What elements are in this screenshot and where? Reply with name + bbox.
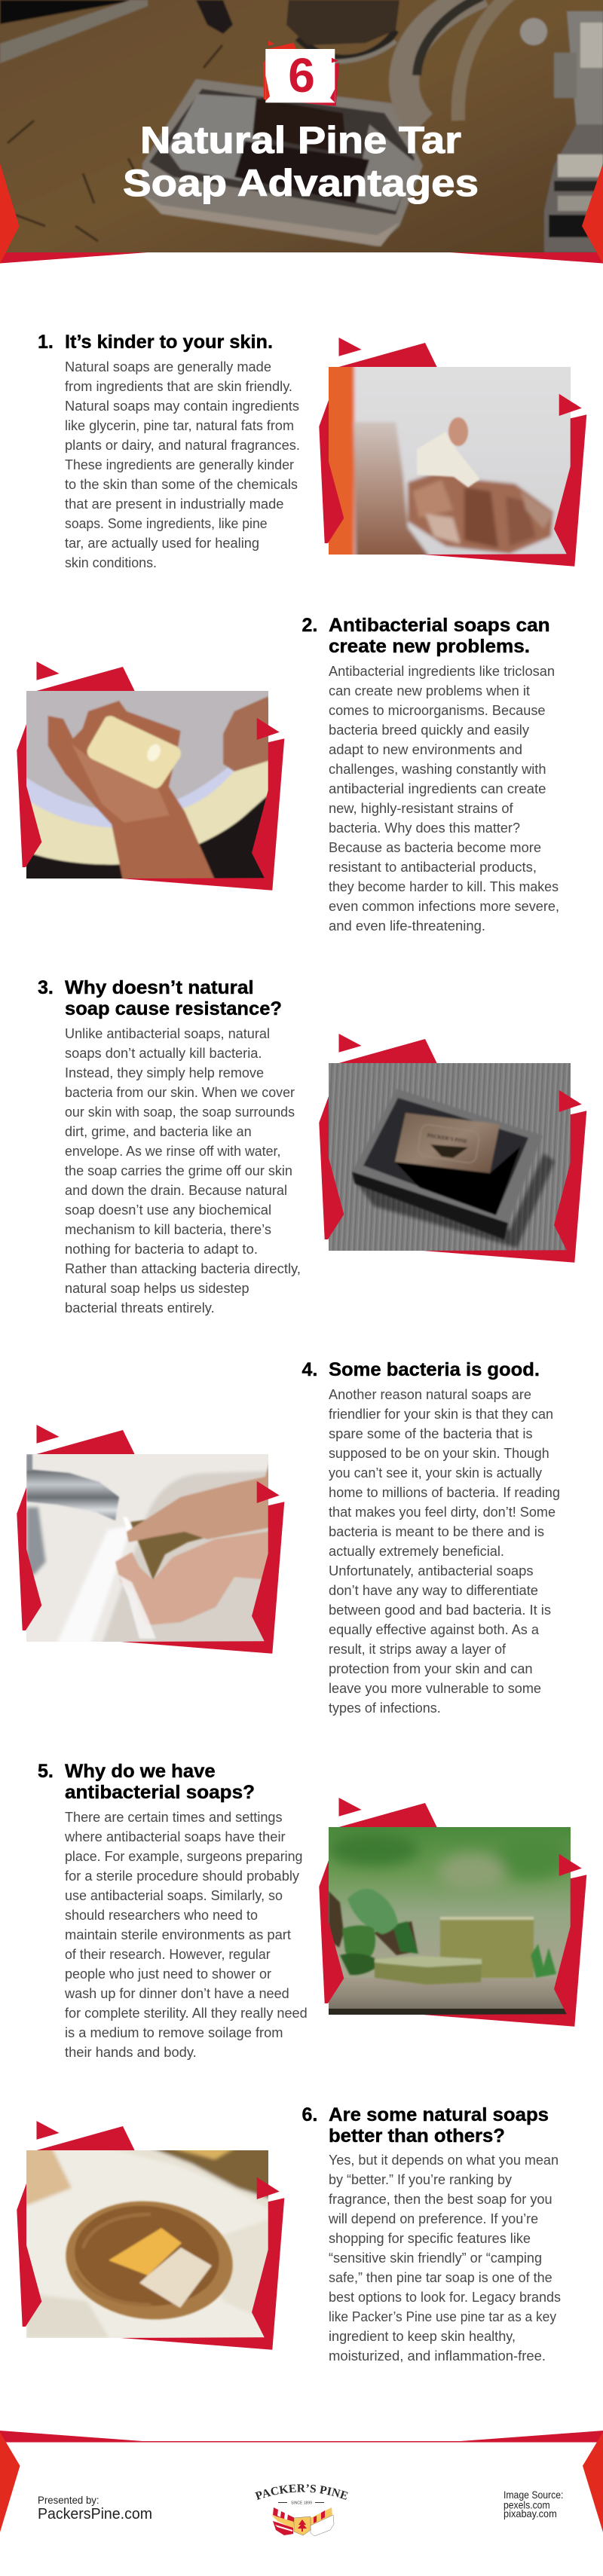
photo 2: hand holding soap over sink bbox=[23, 687, 275, 883]
body text 4: leave you more vulnerable to some bbox=[329, 1681, 541, 1696]
header side shard right bbox=[582, 163, 603, 264]
body text 4: Unfortunately, antibacterial soaps bbox=[329, 1563, 534, 1578]
body text 4: home to millions of bacteria. If reading bbox=[329, 1485, 560, 1500]
body text 3: our skin with soap, the soap surrounds bbox=[65, 1105, 295, 1120]
heading 5: Why do we have bbox=[65, 1761, 216, 1782]
body text 3: dirt, grime, and bacteria like an bbox=[65, 1124, 252, 1139]
photo 5: green soap bars with leaves bbox=[329, 1827, 571, 2015]
presented by: PackersPine.com bbox=[38, 2506, 152, 2523]
heading 3: soap cause resistance? bbox=[65, 998, 282, 1019]
body text 2: can create new problems when it bbox=[329, 683, 530, 698]
body text 5: place. For example, surgeons preparing bbox=[65, 1849, 303, 1864]
section 1: kinder to your skin bbox=[38, 332, 586, 570]
body text 1: tar, are actually used for healing bbox=[65, 536, 259, 551]
body text 6: like Packer’s Pine use pine tar as a key bbox=[329, 2309, 556, 2324]
body text 2: they become harder to kill. This makes bbox=[329, 879, 559, 894]
body text 4: bacteria is meant to be there and is bbox=[329, 1524, 544, 1539]
red frame 5 bbox=[319, 1798, 586, 2027]
heading 3 bbox=[38, 977, 282, 1019]
body text 2: comes to microorganisms. Because bbox=[329, 703, 546, 718]
body text 5: people who just need to shower or bbox=[65, 1966, 271, 1982]
red frame 4 bbox=[17, 1425, 284, 1654]
body text 3: Rather than attacking bacteria directly, bbox=[65, 1261, 301, 1276]
body text 1: Natural soaps may contain ingredients bbox=[65, 399, 299, 414]
body text 4: protection from your skin and can bbox=[329, 1661, 533, 1676]
body text 2: even common infections more severe, bbox=[329, 899, 559, 914]
body text 2: adapt to new environments and bbox=[329, 742, 522, 757]
red frame 2 bbox=[17, 662, 284, 891]
body text 4: equally effective against both. As a bbox=[329, 1622, 540, 1637]
body text 3: and down the drain. Because natural bbox=[65, 1183, 287, 1198]
red frame 6 bbox=[17, 2121, 284, 2350]
photo 3: soap bar in dark tray: PACKER’S PINE bbox=[427, 1132, 468, 1144]
number badge: 6 bbox=[288, 48, 315, 102]
section 5: why antibacterial soaps exist bbox=[38, 1761, 586, 2060]
body text 2: bacteria breed quickly and easily bbox=[329, 723, 529, 738]
title: Natural Pine Tar bbox=[140, 119, 461, 161]
body text 1 bbox=[65, 359, 300, 570]
heading 2: Antibacterial soaps can bbox=[329, 615, 550, 636]
body text 4: you can’t see it, your skin is actually bbox=[329, 1465, 542, 1481]
title bbox=[123, 119, 479, 204]
body text 4: types of infections. bbox=[329, 1701, 441, 1716]
heading 6: 6. bbox=[302, 2104, 317, 2125]
logo: Packer's Pine crest: SINCE 1899 bbox=[291, 2501, 312, 2506]
footer side shard left bbox=[0, 2432, 20, 2532]
body text 5: There are certain times and settings bbox=[65, 1810, 282, 1825]
body text 6: fragrance, then the best soap for you bbox=[329, 2192, 552, 2207]
body text 2: Because as bacteria become more bbox=[329, 840, 541, 855]
heading 3: Why doesn’t natural bbox=[65, 977, 254, 998]
body text 1: like glycerin, pine tar, natural fats from bbox=[65, 418, 294, 433]
section 6: are some natural soaps better bbox=[17, 2104, 561, 2364]
heading 6: Are some natural soaps bbox=[329, 2104, 549, 2125]
body text 2: and even life-threatening. bbox=[329, 918, 485, 934]
body text 5: is a medium to remove soilage from bbox=[65, 2025, 283, 2040]
body text 3: bacterial threats entirely. bbox=[65, 1300, 215, 1316]
body text 1: plants or dairy, and natural fragrances. bbox=[65, 438, 300, 453]
number badge bbox=[263, 41, 339, 106]
header red band left bbox=[0, 252, 148, 264]
body text 3: natural soap helps us sidestep bbox=[65, 1281, 249, 1296]
body text 4: spare some of the bacteria that is bbox=[329, 1426, 533, 1441]
heading 5 bbox=[38, 1761, 255, 1803]
body text 1: These ingredients are generally kinder bbox=[65, 457, 294, 472]
body text 4: that makes you feel dirty, don’t! Some bbox=[329, 1505, 556, 1520]
photo 6: soaps in wooden bowl on linen bbox=[23, 2147, 272, 2342]
body text 1: from ingredients that are skin friendly. bbox=[65, 379, 292, 394]
body text 6 bbox=[328, 2153, 561, 2364]
body text 2: antibacterial ingredients can create bbox=[329, 781, 546, 796]
body text 2: challenges, washing constantly with bbox=[329, 762, 546, 777]
body text 5 bbox=[64, 1810, 308, 2060]
body text 3: bacteria from our skin. When we cover bbox=[65, 1085, 295, 1100]
body text 6: “sensitive skin friendly” or “camping bbox=[329, 2251, 542, 2266]
body text 5: use antibacterial soaps. Similarly, so bbox=[65, 1888, 283, 1903]
heading 1: 1. bbox=[38, 332, 54, 353]
section 3: natural soap and resistance bbox=[38, 977, 586, 1316]
heading 5: 5. bbox=[38, 1761, 54, 1782]
heading 6: better than others? bbox=[329, 2125, 505, 2147]
heading 1: It’s kinder to your skin. bbox=[65, 332, 273, 353]
body text 1: Natural soaps are generally made bbox=[65, 359, 271, 374]
body text 2: Antibacterial ingredients like triclosan bbox=[329, 664, 555, 679]
header photo: soap tin, brush and razor on wooden table bbox=[0, 0, 603, 260]
body text 4 bbox=[329, 1387, 560, 1716]
heading 2: 2. bbox=[302, 615, 317, 636]
heading 6 bbox=[302, 2104, 549, 2147]
body text 5: maintain sterile environments as part bbox=[65, 1927, 291, 1942]
body text 3: the soap carries the grime off our skin bbox=[65, 1163, 292, 1178]
body text 3: mechanism to kill bacteria, there’s bbox=[65, 1222, 271, 1237]
body text 1: skin conditions. bbox=[65, 555, 157, 570]
body text 6: shopping for specific features like bbox=[329, 2231, 531, 2246]
body text 3: Unlike antibacterial soaps, natural bbox=[65, 1026, 270, 1041]
title: Soap Advantages bbox=[123, 162, 479, 204]
body text 4: actually extremely beneficial. bbox=[329, 1544, 504, 1559]
body text 5: their hands and body. bbox=[65, 2045, 197, 2060]
body text 6: moisturized, and inflammation-free. bbox=[329, 2348, 546, 2364]
image source credits: pixabay.com bbox=[504, 2507, 557, 2519]
body text 4: supposed to be on your skin. Though bbox=[329, 1446, 549, 1461]
body text 6: best options to look for. Legacy brands bbox=[329, 2290, 561, 2305]
body text 4: result, it strips away a layer of bbox=[329, 1642, 507, 1657]
photo 3: soap bar in dark tray bbox=[329, 1063, 571, 1251]
body text 1: to the skin than some of the chemicals bbox=[65, 477, 298, 492]
body text 5: wash up for dinner don’t have a need bbox=[64, 1986, 289, 2001]
body text 1: that are present in industrially made bbox=[65, 497, 283, 512]
body text 5: where antibacterial soaps have their bbox=[64, 1829, 286, 1844]
body text 4: don’t have any way to differentiate bbox=[329, 1583, 538, 1598]
presented by bbox=[38, 2494, 152, 2523]
body text 4: Another reason natural soaps are bbox=[329, 1387, 531, 1402]
body text 5: for complete sterility. All they really need bbox=[65, 2006, 308, 2021]
body text 3 bbox=[65, 1026, 301, 1316]
logo: Packer's Pine crest bbox=[255, 2484, 348, 2536]
body text 5: of their research. However, regular bbox=[65, 1947, 271, 1962]
photo 4: hands washing under faucet bbox=[23, 1450, 275, 1646]
image source credits bbox=[504, 2489, 563, 2519]
body text 2: new, highly-resistant strains of bbox=[329, 801, 514, 816]
heading 4: 4. bbox=[302, 1359, 317, 1380]
body text 4: friendlier for your skin is that they can bbox=[329, 1407, 553, 1422]
image source credits: Image Source: bbox=[504, 2489, 563, 2501]
body text 6: by “better.” If you’re ranking by bbox=[329, 2172, 512, 2187]
header side shard left bbox=[0, 163, 20, 264]
body text 2 bbox=[329, 664, 559, 934]
body text 2: bacteria. Why does this matter? bbox=[329, 820, 520, 836]
heading 2: create new problems. bbox=[329, 636, 530, 657]
body text 3: nothing for bacteria to adapt to. bbox=[65, 1242, 258, 1257]
red frame 3 bbox=[319, 1034, 586, 1263]
header red band right bbox=[450, 252, 603, 264]
body text 5: should researchers who need to bbox=[65, 1908, 258, 1923]
body text 3: envelope. As we rinse off with water, bbox=[65, 1144, 280, 1159]
footer side shard right bbox=[583, 2432, 603, 2532]
heading 5: antibacterial soaps? bbox=[65, 1782, 255, 1803]
body text 6: ingredient to keep skin healthy, bbox=[329, 2329, 516, 2344]
heading 2 bbox=[302, 615, 550, 657]
body text 3: soaps don’t actually kill bacteria. bbox=[65, 1046, 262, 1061]
heading 4: Some bacteria is good. bbox=[329, 1359, 540, 1380]
photo 1: hands lathering soap bbox=[329, 367, 571, 555]
heading 3: 3. bbox=[38, 977, 54, 998]
body text 4: between good and bad bacteria. It is bbox=[329, 1603, 551, 1618]
body text 1: soaps. Some ingredients, like pine bbox=[65, 516, 268, 531]
logo: Packer's Pine crest: PACKER’S PINE bbox=[255, 2484, 348, 2500]
presented by: Presented by: bbox=[38, 2494, 99, 2506]
image source credits: pexels.com bbox=[504, 2498, 550, 2510]
red frame 1 bbox=[319, 338, 586, 567]
body text 3: Instead, they simply help remove bbox=[65, 1065, 264, 1080]
body text 6: Yes, but it depends on what you mean bbox=[329, 2153, 559, 2168]
section 2: antibacterial soaps bbox=[17, 615, 559, 934]
section 4: some bacteria is good bbox=[17, 1359, 560, 1716]
footer band bbox=[0, 2431, 603, 2443]
body text 6: will depend on preference. If you’re bbox=[328, 2211, 538, 2226]
body text 2: resistant to antibacterial products, bbox=[329, 860, 537, 875]
body text 5: for a sterile procedure should probably bbox=[65, 1869, 299, 1884]
body text 6: safe,” then pine tar soap is one of the bbox=[329, 2270, 552, 2285]
body text 3: soap doesn’t use any biochemical bbox=[65, 1202, 271, 1218]
